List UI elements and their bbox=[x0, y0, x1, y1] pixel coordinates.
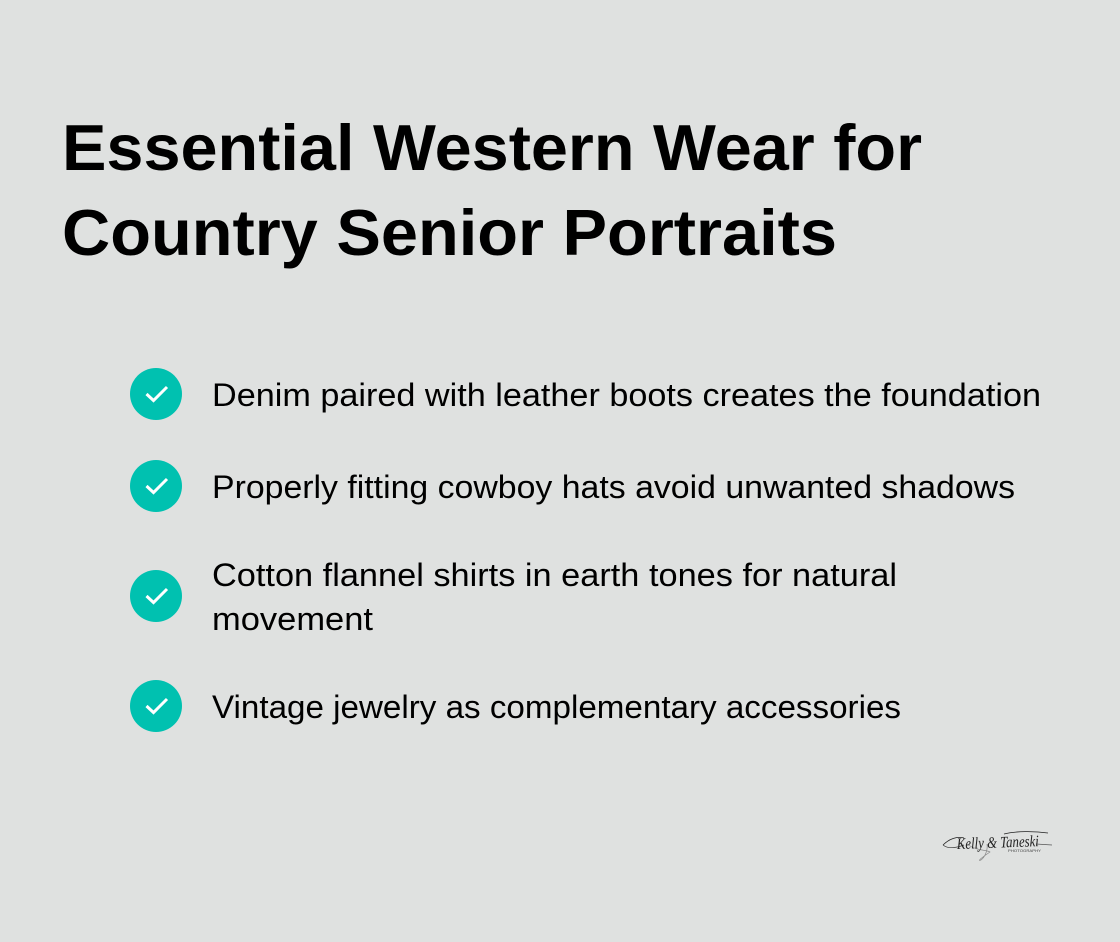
item: flannel shirts: movement bbox=[212, 601, 373, 637]
item: cowboy hats bbox=[130, 460, 1015, 512]
item: denim and boots: Denim paired with leather boots creates the foundation bbox=[212, 377, 1041, 413]
checklist bbox=[130, 368, 1041, 732]
title: Essential Western Wear for bbox=[62, 111, 922, 184]
item: vintage jewelry bbox=[130, 680, 901, 732]
signature logo: PHOTOGRAPHY bbox=[1008, 849, 1042, 853]
title bbox=[62, 111, 922, 269]
signature logo: Kelly & Taneski bbox=[956, 833, 1039, 853]
signature logo bbox=[943, 832, 1052, 860]
title: Country Senior Portraits bbox=[62, 196, 837, 269]
item: vintage jewelry: Vintage jewelry as complementary accessories bbox=[212, 689, 901, 725]
item: cowboy hats: Properly fitting cowboy hats avoid unwanted shadows bbox=[212, 469, 1015, 505]
item: flannel shirts: Cotton flannel shirts in earth tones for natural bbox=[212, 557, 897, 593]
item: flannel shirts bbox=[130, 557, 897, 637]
item: denim and boots bbox=[130, 368, 1041, 420]
